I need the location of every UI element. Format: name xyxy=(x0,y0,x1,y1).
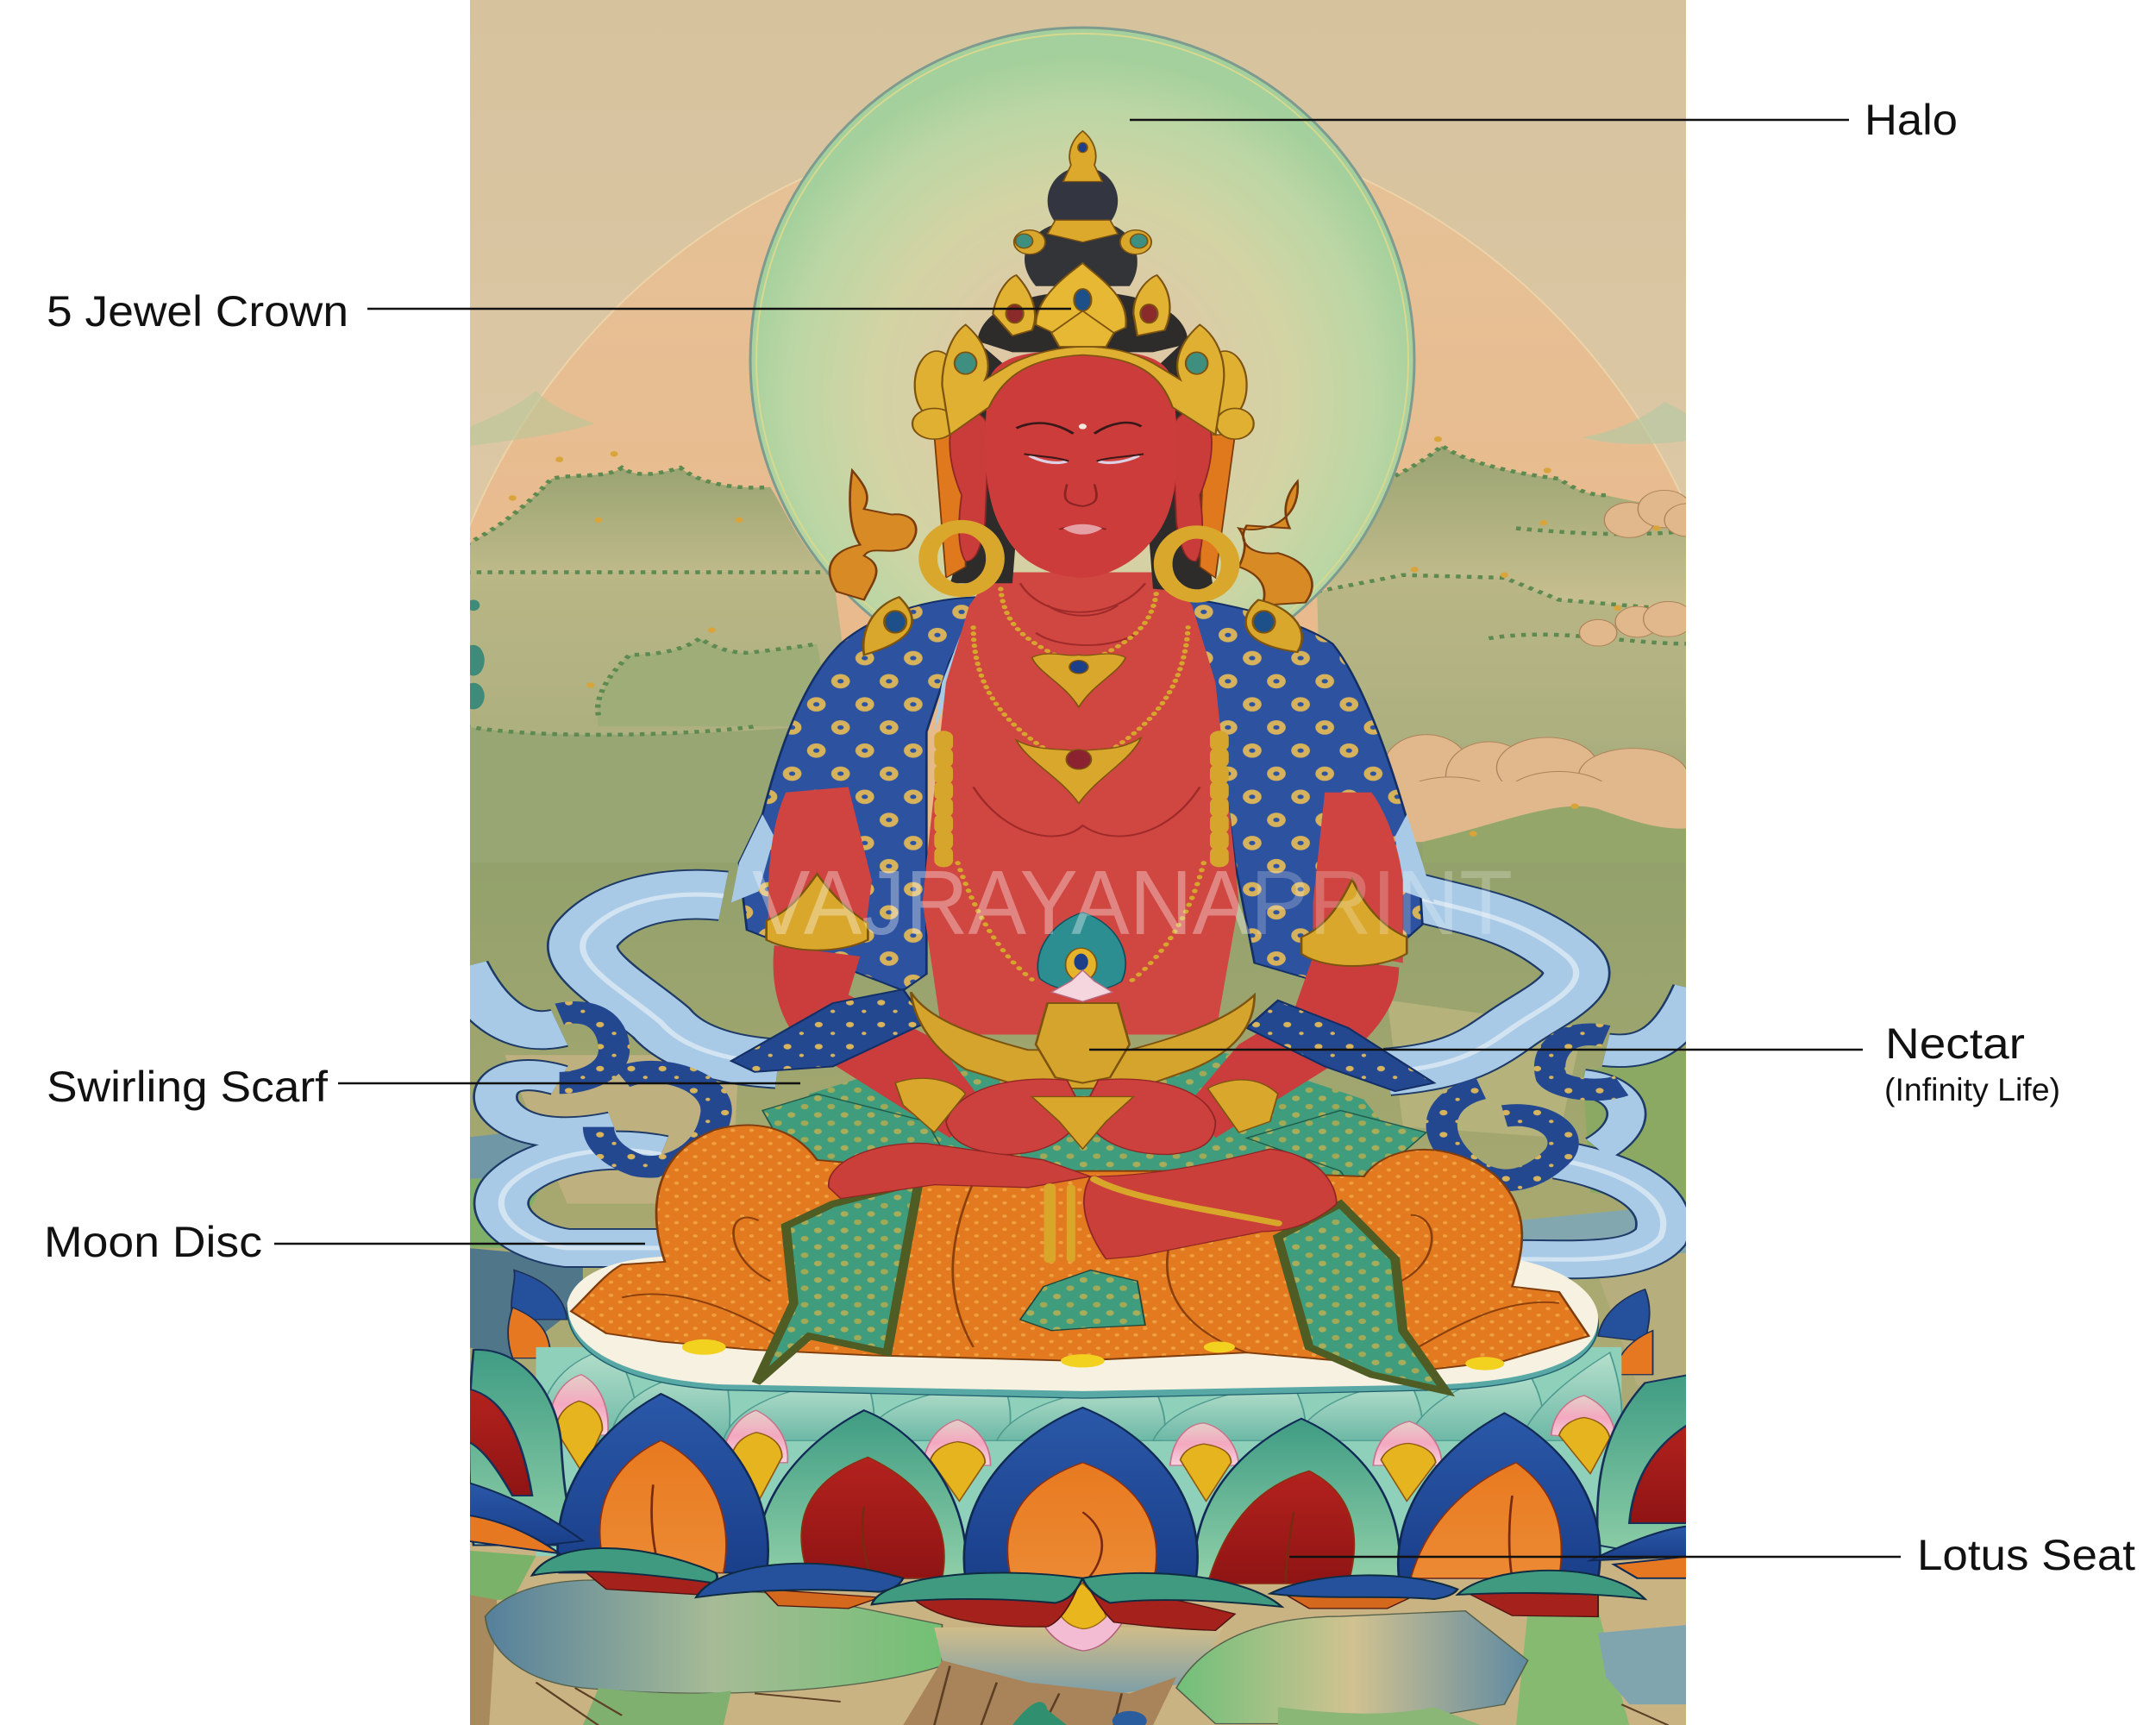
orange sun disc xyxy=(470,178,1686,851)
meadow flowers xyxy=(509,436,1661,837)
center green cloth xyxy=(1020,1270,1145,1331)
callout: 5 Jewel Crown: 5 Jewel Crown xyxy=(47,287,348,336)
green drape right xyxy=(1278,1204,1446,1391)
inner petal colours xyxy=(600,1440,1561,1584)
earring ribbons and flames xyxy=(830,470,1313,605)
earrings xyxy=(928,527,1231,596)
hair behind head xyxy=(950,342,1215,594)
landscape: lower ground and rocks xyxy=(466,862,1690,1725)
callout: Nectar (Infinity Life): (Infinity Life) xyxy=(1884,1072,2060,1107)
cloth green upper left and right xyxy=(762,1094,1426,1193)
bottom red leaves xyxy=(583,1570,1598,1630)
shoulder jewels xyxy=(863,597,1302,655)
outer side petals xyxy=(466,1350,1690,1562)
forearms xyxy=(774,945,1399,1138)
urna and lips xyxy=(1063,423,1102,535)
tree at left edge xyxy=(470,599,485,709)
halo xyxy=(749,26,1416,618)
neck and chest shading lines xyxy=(974,583,1200,837)
hands in lap xyxy=(895,1078,1278,1155)
callout: Swirling Scarf: Swirling Scarf xyxy=(47,1063,328,1111)
necklace pendants xyxy=(1016,654,1141,803)
panel: lotus seat xyxy=(466,1257,1690,1651)
hair bun xyxy=(977,166,1188,352)
long necklace and chains xyxy=(943,589,1219,982)
grass tufts along hill ridges xyxy=(470,445,1686,737)
torso xyxy=(923,573,1239,1034)
watermark: PRINT xyxy=(1250,852,1513,954)
arm bracelets xyxy=(767,874,1407,966)
upper arms xyxy=(768,787,1403,963)
swirling scarves: pale blue and dark blue ribbons xyxy=(461,894,1695,1259)
facial features xyxy=(1016,423,1144,530)
legs and feet xyxy=(829,1143,1337,1259)
callout: Lotus Seat: Lotus Seat xyxy=(1917,1531,2135,1579)
ears xyxy=(950,411,1212,561)
pink lotus buds with yellow stamens xyxy=(548,1375,1615,1465)
landscape: upper hills xyxy=(462,391,1711,862)
shoulder scarf: left xyxy=(739,597,985,990)
crown finial jewel xyxy=(1014,131,1151,254)
gem: nectar vase jewel xyxy=(1037,913,1125,1001)
cloth behind lap xyxy=(793,1050,1403,1182)
face xyxy=(985,351,1177,578)
figure group xyxy=(461,131,1695,1651)
bottom green and blue leaves xyxy=(532,1548,1645,1607)
right clouds xyxy=(1383,490,1711,842)
callout: Halo: Halo xyxy=(1865,96,1958,144)
scarf pale lining xyxy=(731,605,1434,902)
panel: thangka painting xyxy=(419,0,1745,1725)
yellow cloth tips xyxy=(682,1339,1504,1371)
knee drapery lines xyxy=(622,1182,1559,1352)
orange dhoti xyxy=(571,1125,1589,1369)
callout: Nectar (Infinity Life) xyxy=(1089,1019,2060,1107)
five jewel crown xyxy=(912,263,1254,439)
callout: Nectar (Infinity Life): Nectar xyxy=(1885,1019,2025,1068)
watermark: VAJRAYANA xyxy=(752,852,1250,954)
moon disc teal rim xyxy=(566,1306,1599,1399)
background sky xyxy=(470,0,1686,523)
gold waist belt and nectar vase xyxy=(911,992,1255,1088)
orange crown ribbons xyxy=(934,435,1235,578)
gold anklet xyxy=(1050,1179,1278,1259)
callout: Moon Disc: Moon Disc xyxy=(44,1218,262,1266)
shoulder scarf: right xyxy=(1181,597,1422,990)
bottom pink bud xyxy=(1040,1584,1125,1651)
back side petals xyxy=(508,1270,1653,1375)
watermark xyxy=(752,852,1513,954)
low side leaves xyxy=(466,1482,1690,1578)
green drape left xyxy=(756,1182,918,1383)
large front petals xyxy=(558,1394,1600,1578)
scarf bands across forearms xyxy=(731,989,1434,1091)
moon disc xyxy=(567,1257,1598,1391)
back row petals xyxy=(536,1347,1621,1440)
